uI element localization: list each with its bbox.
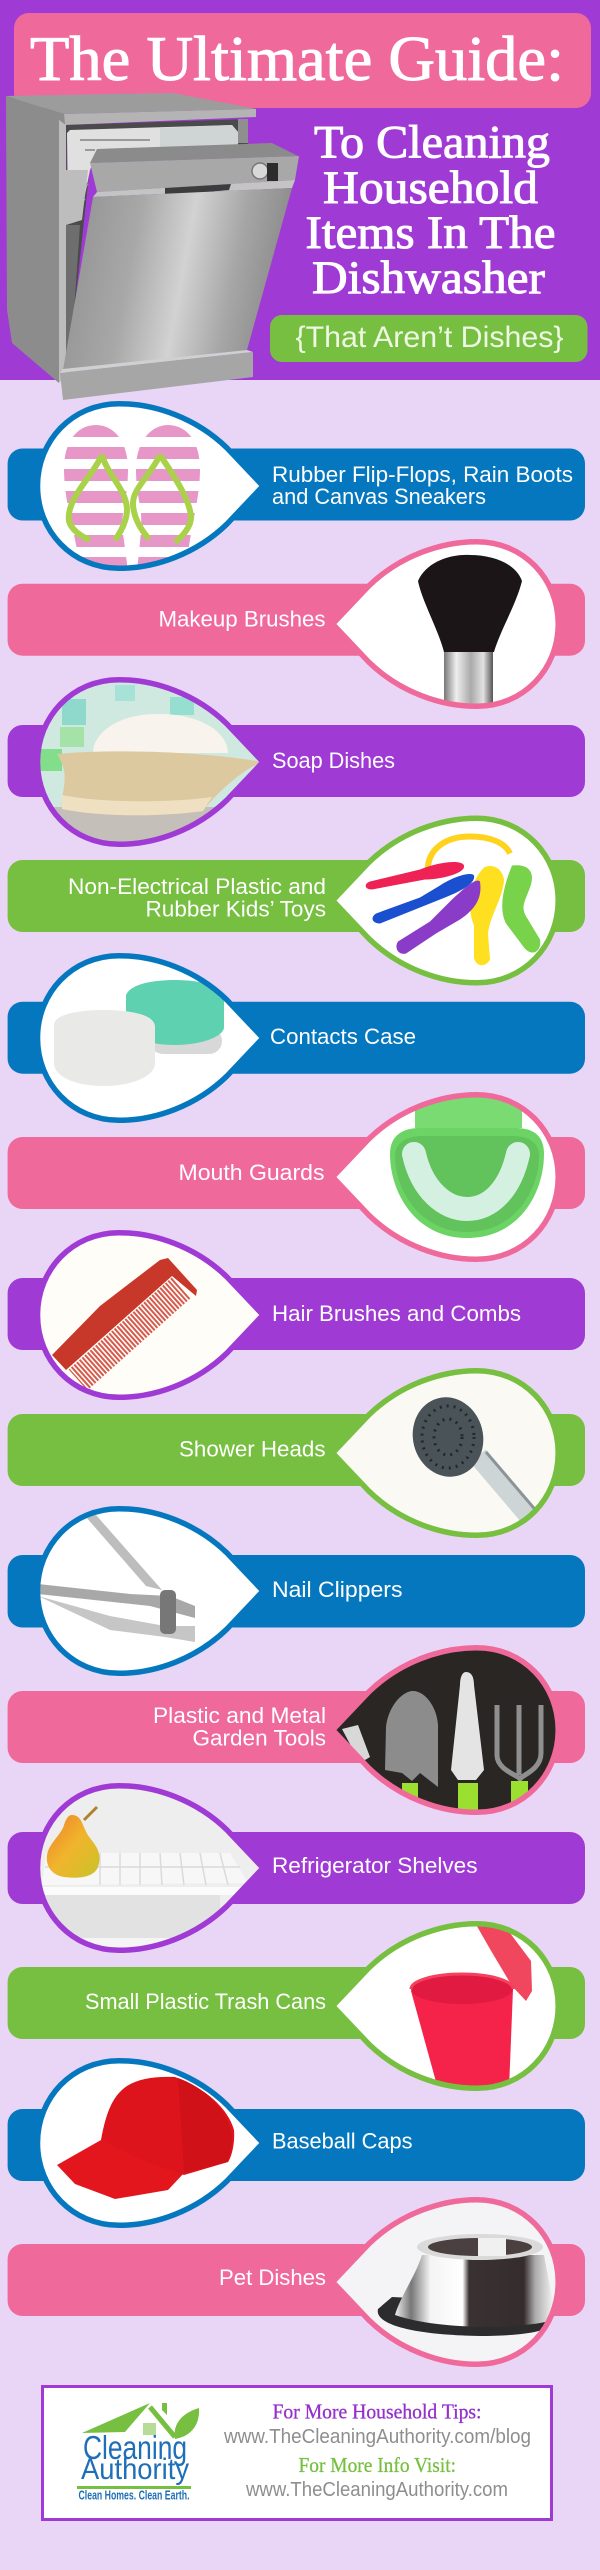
panel: mouth guards — [8, 1095, 585, 1259]
drop: shower head photo — [333, 1371, 558, 1543]
drop: pet dish photo — [333, 2200, 560, 2364]
icon: contacts case — [54, 980, 224, 1086]
subtitle: To Cleaning — [314, 116, 550, 168]
drop: comb photo — [38, 1233, 263, 1397]
logo: The Cleaning Authority — [77, 2403, 199, 2502]
title banner: The Ultimate Guide: — [30, 23, 564, 94]
panel: contacts case — [8, 956, 585, 1120]
label: kids toys: Rubber Kids’ Toys — [146, 896, 326, 922]
panel: kids toys — [8, 818, 585, 983]
label: pet dishes: Pet Dishes — [219, 2265, 326, 2290]
label: flip-flops: and Canvas Sneakers — [272, 484, 486, 509]
tag: that aren't dishes: {That Aren’t Dishes} — [296, 321, 564, 354]
panel: soap dishes — [8, 677, 585, 847]
panel: flip-flops — [8, 404, 585, 571]
panel: trash cans — [8, 1917, 585, 2089]
icon: baseball cap — [57, 2077, 234, 2199]
label: contacts case: Contacts Case — [270, 1024, 416, 1049]
subtitle: Items In The — [306, 207, 556, 259]
panel: makeup brushes — [8, 542, 585, 711]
panel: nail clippers — [8, 1509, 585, 1673]
panel: shower heads — [8, 1371, 585, 1543]
drop: nail clippers photo — [38, 1509, 263, 1673]
contact text: www.TheCleaningAuthority.com/blog — [223, 2426, 531, 2448]
drop: baseball cap photo — [38, 2061, 263, 2225]
panel: garden tools — [8, 1648, 585, 1813]
drop: contacts case photo — [38, 956, 263, 1120]
label: kids toys — [68, 874, 326, 922]
icon: makeup brush — [418, 555, 522, 711]
label: baseball caps: Baseball Caps — [272, 2128, 412, 2154]
logo: The Cleaning Authority: Clean Homes. Clean Earth. — [78, 2488, 190, 2502]
panel: refrigerator shelves — [8, 1786, 585, 1950]
drop: makeup brush photo — [333, 542, 558, 711]
label: makeup brushes: Makeup Brushes — [158, 606, 326, 632]
icon: shower head — [412, 1397, 535, 1520]
icon: shelf with pear — [42, 1806, 246, 1938]
drop: garden tools photo — [333, 1648, 558, 1813]
label: garden tools: Garden Tools — [192, 1726, 326, 1750]
drop: mouth guard photo — [333, 1095, 558, 1259]
drop: soap dish photo — [40, 677, 260, 847]
title banner — [14, 13, 591, 108]
illustration: dishwasher — [6, 93, 299, 400]
drop: trash can photo — [333, 1917, 558, 2089]
label: garden tools — [153, 1703, 326, 1750]
label: flip-flops: Rubber Flip-Flops, Rain Boots — [272, 462, 573, 487]
contact text — [223, 2400, 531, 2501]
subtitle: Dishwasher — [312, 252, 545, 304]
label: combs: Hair Brushes and Combs — [272, 1301, 521, 1326]
contact text: www.TheCleaningAuthority.com — [245, 2479, 508, 2501]
drop: refrigerator shelf photo — [38, 1786, 263, 1950]
panel: combs — [8, 1233, 585, 1397]
contact text: For More Household Tips: — [272, 2400, 482, 2424]
icon: soap dish — [40, 682, 260, 842]
drop: flip-flops photo — [38, 404, 263, 571]
contact text: For More Info Visit: — [298, 2453, 456, 2477]
subtitle — [306, 116, 556, 304]
label: soap dishes: Soap Dishes — [272, 748, 395, 773]
icon: plastic keys — [366, 836, 540, 965]
logo: The Cleaning Authority: Authority — [81, 2453, 189, 2486]
icon: nail clippers — [38, 1515, 195, 1642]
label: refrigerator shelves: Refrigerator Shelves — [272, 1853, 478, 1878]
icon: trash can — [411, 1917, 532, 2089]
icon: garden tools — [342, 1672, 541, 1813]
panel: baseball caps — [8, 2061, 585, 2225]
tag: that aren't dishes — [270, 315, 588, 362]
label: shower heads: Shower Heads — [179, 1436, 326, 1462]
icon: comb — [52, 1258, 197, 1380]
label: mouth guards: Mouth Guards — [178, 1160, 324, 1185]
footer panel — [42, 2386, 552, 2520]
label: flip-flops — [272, 462, 573, 509]
label: nail clippers: Nail Clippers — [272, 1577, 402, 1602]
icon: mouth guard — [390, 1096, 544, 1238]
label: trash cans: Small Plastic Trash Cans — [85, 1989, 326, 2014]
label: garden tools: Plastic and Metal — [153, 1703, 326, 1728]
header panel — [0, 0, 600, 380]
label: kids toys: Non-Electrical Plastic and — [68, 874, 326, 899]
drop: plastic keys photo — [333, 818, 558, 983]
panel: pet dishes — [8, 2200, 585, 2364]
icon: flip-flops — [64, 425, 200, 571]
subtitle: Household — [323, 162, 538, 214]
icon: pet dish — [378, 2234, 560, 2336]
logo: The Cleaning Authority: Cleaning — [83, 2429, 187, 2466]
